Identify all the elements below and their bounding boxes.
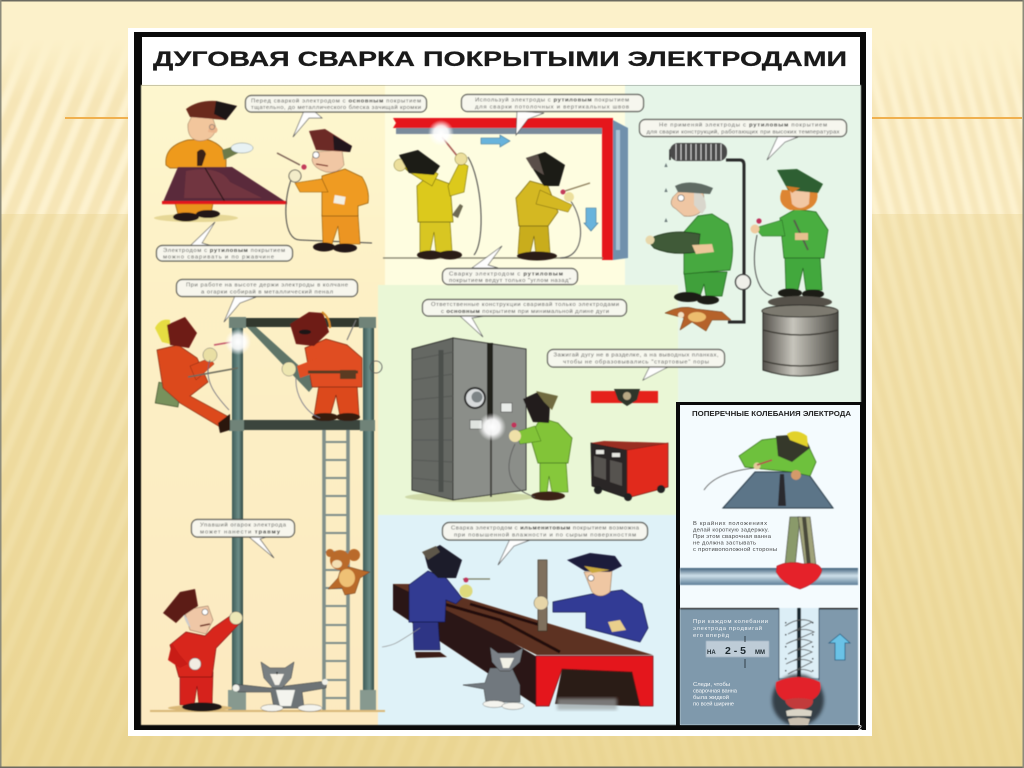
spark at scaffold xyxy=(225,329,251,355)
callout: striking the arc: чтобы не образовывались "стартовые" поры xyxy=(563,360,709,366)
arrow: weld travel direction xyxy=(829,634,850,660)
callout: electrode stub injury: может нанести травму xyxy=(200,530,281,536)
steel plate lower xyxy=(680,608,858,725)
steel cross section xyxy=(680,568,858,585)
callout: striking the arc: Зажигай дугу не в разделке, а на выводных планках, xyxy=(554,352,719,358)
instruction text: end positions xyxy=(693,520,777,553)
title: ДУГОВАЯ СВАРКА ПОКРЫТЫМИ ЭЛЕКТРОДАМИ xyxy=(153,48,847,71)
callout: rutile backhand angle: Сварку электродом с рутиловым xyxy=(449,272,563,278)
figure: welder on scaffold xyxy=(282,312,382,421)
instruction text: end positions: делай короткую задержку. xyxy=(693,526,769,534)
figure: green welder at safe xyxy=(509,391,572,500)
figure: welding machine xyxy=(591,441,668,501)
poster number: 2 xyxy=(858,725,862,732)
figure: mouse on ladder xyxy=(326,549,370,595)
instruction text: oscillation advance: его вперёд xyxy=(693,633,730,639)
instruction text: oscillation advance: электрода продвигай xyxy=(693,625,762,632)
callout: electrode stub injury xyxy=(192,520,294,558)
figure: woman welder in green xyxy=(750,169,828,298)
dimension: 2 to 5 mm: ММ xyxy=(755,650,765,656)
callout: rutile backhand angle: покрытием ведут только "углом назад" xyxy=(449,278,571,284)
callout: electrode stub injury: Упавший огарок электрода xyxy=(200,522,287,528)
oscillation path xyxy=(785,620,814,674)
weld sample with start crater xyxy=(591,389,658,406)
instruction text: weld pool: Следи, чтобы xyxy=(693,682,730,688)
dimension: 2 to 5 mm: 2 - 5 xyxy=(725,645,746,657)
figure: welder holding plate xyxy=(154,101,287,222)
figure: welder hanging on belt xyxy=(155,317,238,433)
figure: welder in orange with electrode xyxy=(277,129,372,252)
instruction text: end positions: не должна застывать xyxy=(693,540,756,546)
figure: red welder warning xyxy=(163,589,242,712)
callout: critical structures: Ответственные конструкции сваривай только электродами xyxy=(431,301,619,308)
callout: working at height: а огарки собирай в металлический пенал xyxy=(201,288,334,296)
title xyxy=(142,37,860,85)
electrodes xyxy=(785,517,800,566)
callout: ilmenite in humidity: Сварка электродом с ильменитовым покрытием возможна xyxy=(451,526,640,532)
measurement band xyxy=(706,641,769,657)
figure: old welder in green xyxy=(646,182,733,304)
callout: rutile over rust xyxy=(156,222,292,261)
callout: main coating edge cleaning xyxy=(246,96,426,137)
panel title: ПОПЕРЕЧНЫЕ КОЛЕБАНИЯ ЭЛЕКТРОДА xyxy=(692,409,852,418)
figure: blue welder with rod xyxy=(534,553,648,642)
callouts xyxy=(156,94,846,565)
figure: grey cat on floor xyxy=(232,662,328,712)
figure: channel beam xyxy=(393,584,653,710)
figure: flattened mouse xyxy=(665,307,731,331)
dimension: 2 to 5 mm xyxy=(707,636,765,668)
instruction text: end positions: В крайних положениях xyxy=(693,520,767,527)
callout: rutile ceiling and vertical: Используй электроды с рутиловым покрытием xyxy=(475,96,629,104)
instruction text: end positions: При этом сварочная ванна xyxy=(693,534,772,540)
figure: safe welded seam xyxy=(405,338,535,502)
panel: transverse electrode oscillation xyxy=(676,402,866,730)
callout: main coating edge cleaning: Перед сваркой электродом с основным покрытием xyxy=(251,98,421,104)
instruction text: end positions: с противоположной стороны xyxy=(693,546,777,553)
panel backgrounds xyxy=(141,85,861,725)
instruction text: oscillation advance xyxy=(693,619,768,639)
poster xyxy=(128,28,872,736)
callout: high temperature warning: для сварки конструкций, работающих при высоких температурах xyxy=(646,128,840,136)
poster frame xyxy=(128,28,872,736)
callout: high temperature warning xyxy=(640,120,846,160)
callout: striking the arc xyxy=(548,350,724,380)
figure: yellow welder with arc xyxy=(516,152,590,260)
callout: main coating edge cleaning: тщательно, до металлического блеска зачищай кромки xyxy=(251,104,421,111)
oscillation illustrations xyxy=(680,431,858,726)
figure: pedestal cylinder xyxy=(762,296,838,376)
figure: scaffold with ladder xyxy=(150,317,385,712)
callout: high temperature warning: Не применяй электроды с рутиловым покрытием xyxy=(659,122,827,128)
callout: working at height xyxy=(176,280,358,322)
callout: working at height: При работе на высоте держи электроды в колчане xyxy=(186,282,349,288)
callout: rutile ceiling and vertical xyxy=(462,94,644,135)
figure: grey cat under beam xyxy=(463,647,524,710)
instruction text: weld pool: сварочная ванна xyxy=(693,688,738,694)
figure: blue welder with mask xyxy=(382,545,490,658)
callout: rutile ceiling and vertical: для сварки потолочных и вертикальных швов xyxy=(475,104,629,110)
spark on safe xyxy=(478,413,506,441)
callout: ilmenite in humidity xyxy=(442,522,648,565)
decorative orange rule xyxy=(65,117,1022,119)
callout: rutile backhand angle xyxy=(442,246,578,284)
dimension: 2 to 5 mm: НА xyxy=(707,650,716,656)
illustrations xyxy=(150,101,838,712)
instruction text: weld pool xyxy=(693,682,738,708)
weld bead xyxy=(772,674,824,726)
beam: red corner joint xyxy=(383,118,628,260)
callout: critical structures xyxy=(422,300,626,337)
molten weld pool xyxy=(776,562,822,589)
instruction text: weld pool: по всей ширине xyxy=(693,700,734,708)
arrow: weld direction down xyxy=(584,208,598,231)
callout: rutile over rust: Электродом с рутиловым покрытием xyxy=(163,248,285,254)
instruction text: oscillation advance: При каждом колебании xyxy=(693,619,768,625)
callout: rutile over rust: можно сваривать и по ржавчине xyxy=(163,254,275,260)
callout: critical structures: с основным покрытием при минимальной длине дуги xyxy=(441,308,609,315)
instruction text: weld pool: была жидкой xyxy=(693,694,729,701)
figure: water coil and pipe with gauge xyxy=(664,143,750,322)
figure: yellow welder overhead xyxy=(394,120,481,260)
arrow: weld direction right xyxy=(481,135,510,147)
callout: ilmenite in humidity: при повышенной влажности и по сырым поверхностям xyxy=(454,532,636,538)
